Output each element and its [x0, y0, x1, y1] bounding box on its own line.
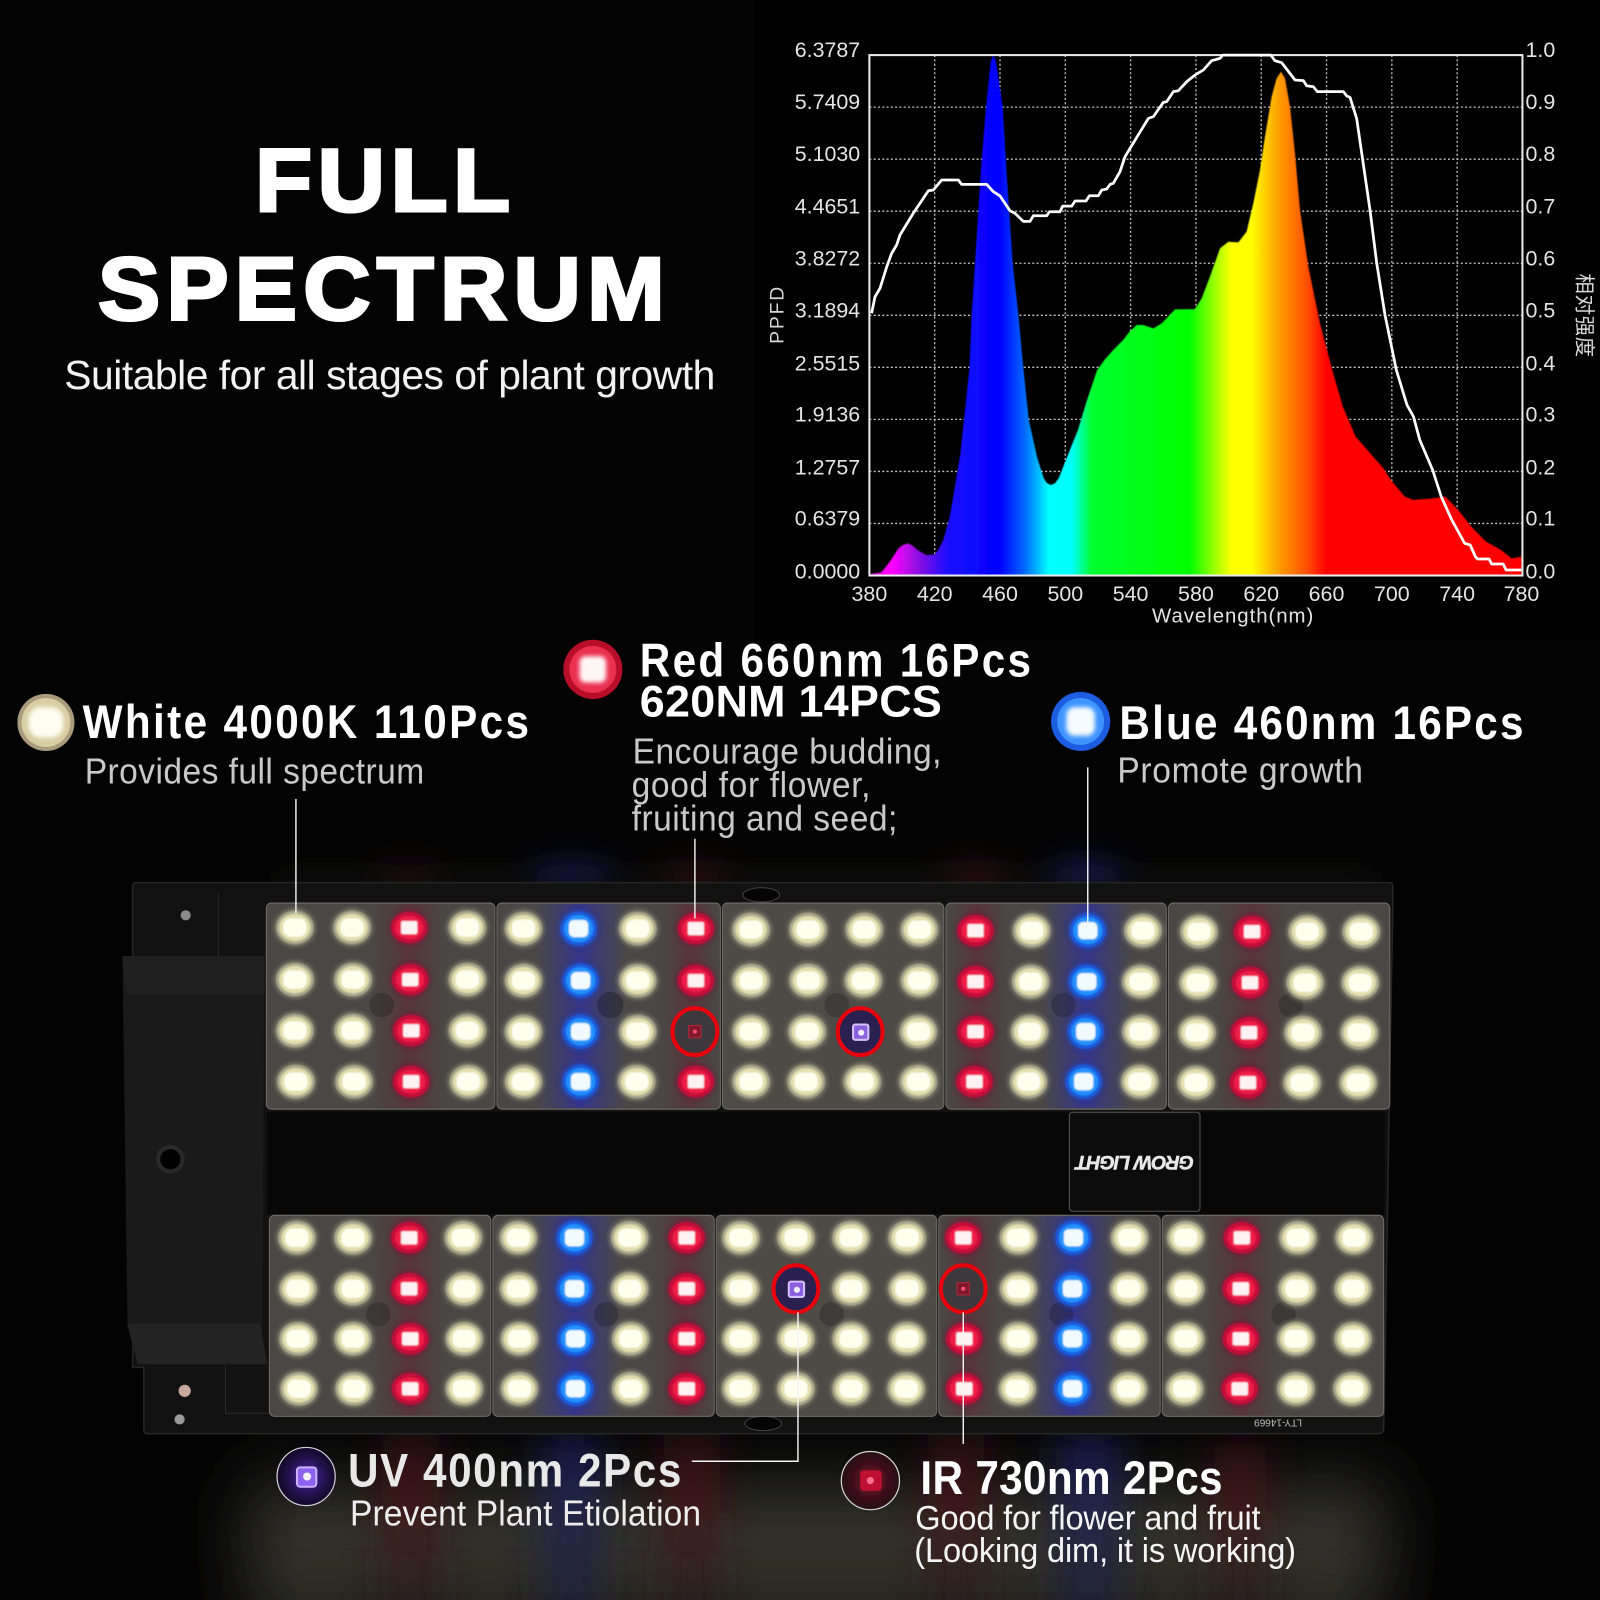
label: UV LED [348, 1446, 701, 1534]
wavelength axis labels: 420 [917, 582, 953, 606]
highlighted UV LED top [838, 1008, 883, 1055]
leader lines [296, 767, 1088, 1461]
subtitle: Suitable for all stages of plant growth [64, 352, 715, 398]
right axis labels: 0.3 [1526, 402, 1555, 426]
grow light label plate [1069, 1112, 1200, 1211]
label: IR LED [914, 1453, 1296, 1570]
wavelength axis labels: 380 [852, 582, 887, 606]
driver box [122, 956, 267, 1364]
mounting holes and slots [174, 888, 782, 1431]
chart: spectrum graph [767, 38, 1596, 627]
right axis labels: 0.5 [1526, 298, 1555, 322]
model number print: LTY-14669 [1254, 1416, 1302, 1427]
right axis labels: 0.4 [1526, 351, 1555, 375]
left axis labels: 2.5515 [795, 351, 860, 375]
icon: IR LED [841, 1452, 899, 1510]
floor reflection: coloured bands [383, 1434, 1265, 1600]
label: IR LED: IR 730nm 2Pcs [920, 1453, 1223, 1504]
wavelength axis labels [852, 582, 1539, 606]
wavelength axis labels: 580 [1178, 582, 1214, 606]
left axis labels: 3.1894 [795, 298, 860, 322]
left axis labels: 4.4651 [795, 194, 860, 218]
icon: blue LED [1051, 692, 1110, 751]
left axis labels: 5.7409 [795, 90, 860, 114]
top LED modules [266, 903, 1390, 1109]
light board [122, 883, 1393, 1434]
title: Full Spectrum: SPECTRUM [98, 240, 665, 339]
label: white LED: Provides full spectrum [85, 753, 424, 792]
right axis labels [1526, 38, 1555, 584]
left axis labels: 5.1030 [795, 142, 860, 166]
label: red LED: Encourage budding, [633, 732, 942, 772]
relative intensity line [872, 55, 1521, 570]
left axis labels: 6.3787 [795, 38, 860, 62]
right axis labels: 0.6 [1526, 246, 1555, 270]
right axis labels: 0.2 [1526, 455, 1555, 479]
right axis labels: 0.9 [1526, 90, 1555, 114]
highlighted IR LED top [672, 1008, 717, 1055]
chart frame [869, 55, 1522, 576]
x axis title: Wavelength(nm) [1152, 605, 1313, 627]
label: UV LED: Prevent Plant Etiolation [350, 1495, 701, 1534]
left axis title: PPFD [767, 287, 789, 344]
wavelength axis labels: 700 [1374, 582, 1410, 606]
wavelength axis labels: 460 [982, 582, 1018, 606]
label: IR LED: (Looking dim, it is working) [914, 1532, 1296, 1570]
bottom LED array [272, 1214, 1379, 1412]
wavelength axis labels: 740 [1439, 582, 1475, 606]
label: blue LED: Blue 460nm 16Pcs [1119, 698, 1523, 749]
label: red LED: Red 660nm 16Pcs [640, 636, 1031, 687]
board body [133, 883, 1393, 1434]
highlighted IR LED bottom [941, 1265, 986, 1312]
left axis labels: 1.9136 [795, 402, 860, 426]
title: Full Spectrum: FULL [255, 132, 510, 231]
wavelength axis labels: 620 [1243, 582, 1279, 606]
right axis labels: 1.0 [1526, 38, 1555, 62]
left axis labels: 0.0000 [795, 560, 860, 584]
top LED array [270, 905, 1386, 1105]
icon: red LED [563, 640, 622, 699]
right axis title: 相对强度 [1573, 273, 1596, 357]
left axis labels [795, 38, 860, 584]
right axis labels: 0.0 [1526, 560, 1555, 584]
glow above the light board [276, 861, 1378, 886]
label: blue LED [1117, 698, 1523, 791]
spectrum area fill [870, 55, 1522, 576]
label: red LED: fruiting and seed; [632, 800, 897, 839]
grow light label plate: GROW LIGHT [1073, 1151, 1194, 1173]
title: Full Spectrum [98, 132, 665, 339]
icon: UV LED [277, 1447, 335, 1506]
label: white LED [83, 697, 529, 792]
right axis labels: 0.8 [1526, 142, 1555, 166]
label: red LED [632, 636, 1031, 839]
left axis labels: 0.6379 [795, 507, 860, 531]
wavelength axis labels: 660 [1309, 582, 1344, 606]
right axis labels: 0.7 [1526, 194, 1555, 218]
highlighted UV LED bottom [773, 1265, 818, 1312]
right axis labels: 0.1 [1526, 507, 1555, 531]
label: red LED: 620NM 14PCS [640, 675, 942, 726]
label: white LED: White 4000K 110Pcs [83, 697, 529, 748]
label: blue LED: Promote growth [1117, 752, 1363, 791]
chart gridlines [869, 55, 1522, 576]
icon: white LED [17, 694, 74, 751]
wavelength axis labels: 780 [1504, 582, 1539, 606]
label: IR LED: Good for flower and fruit [915, 1500, 1261, 1538]
left axis labels: 3.8272 [795, 246, 860, 270]
bottom LED modules [269, 1215, 1384, 1416]
left axis labels: 1.2757 [795, 455, 860, 479]
label: UV LED: UV 400nm 2Pcs [348, 1446, 681, 1497]
floor reflection: warm base [245, 1454, 1388, 1600]
label: red LED: good for flower, [632, 766, 870, 805]
wavelength axis labels: 500 [1047, 582, 1083, 606]
wavelength axis labels: 540 [1113, 582, 1149, 606]
